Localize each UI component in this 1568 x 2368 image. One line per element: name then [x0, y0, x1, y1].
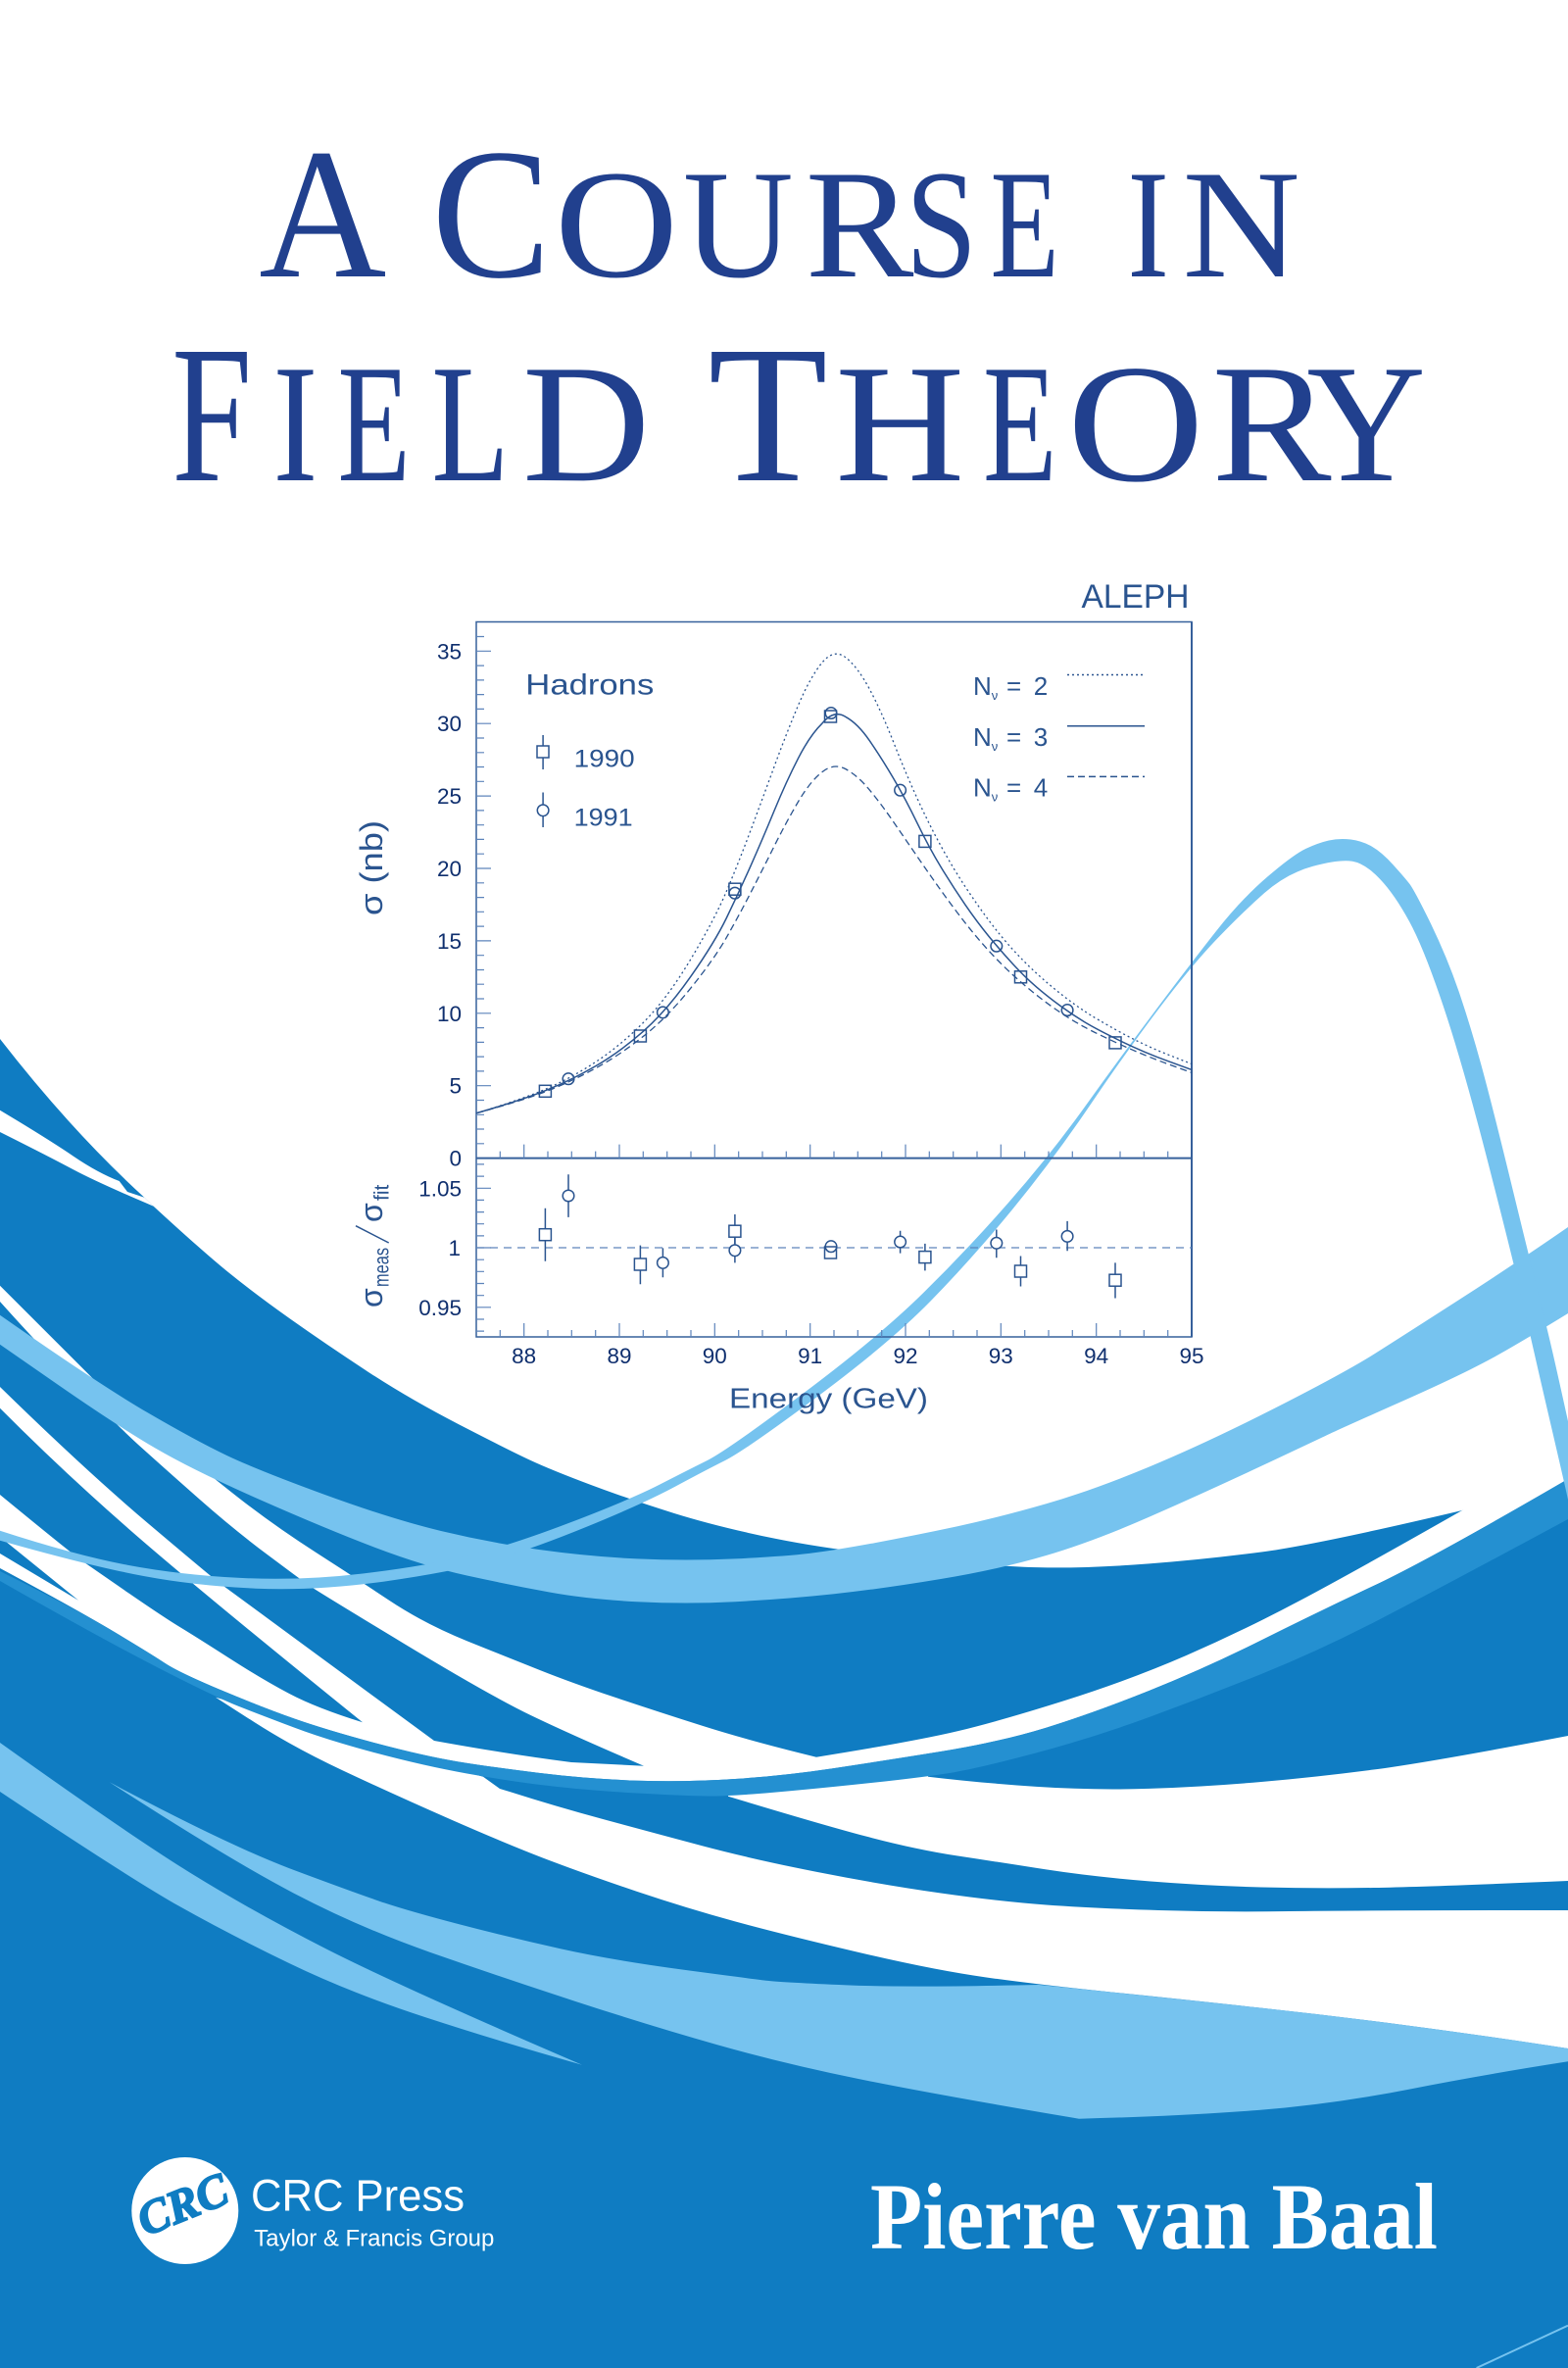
y axis numbers: 15: [437, 929, 462, 954]
author name: Pierre van Baal: [870, 2164, 1438, 2269]
title line 1: N: [1182, 139, 1300, 311]
title line 1: C: [431, 112, 551, 318]
light blue arc: tapered line rising over the chart: [0, 839, 1568, 1589]
legend: neutrino families: ν: [992, 739, 998, 754]
title line 2: Y: [1306, 331, 1426, 518]
title line 1: A: [259, 112, 386, 318]
legend: data series: [525, 669, 654, 831]
curves: neutrino family predictions: [476, 654, 1192, 1113]
y axis numbers: [418, 639, 462, 1320]
y axis numbers: 25: [437, 784, 462, 809]
x axis numbers: 91: [798, 1344, 822, 1368]
legend: neutrino families: =: [1006, 722, 1021, 752]
x axis numbers: 92: [893, 1344, 918, 1368]
y axis numbers: 1.05: [418, 1176, 462, 1201]
medium blue ribbon: [0, 1479, 1568, 1797]
y axis title: ratio: [354, 1184, 394, 1307]
legend: neutrino families: 2: [1034, 671, 1048, 701]
x axis numbers: 93: [989, 1344, 1013, 1368]
logo roundel: CRC: [130, 2163, 236, 2246]
axis ticks: [476, 637, 1168, 1337]
title line 2: I: [272, 331, 318, 518]
publisher group: Taylor & Francis Group: [254, 2226, 494, 2252]
x axis numbers: 95: [1179, 1344, 1204, 1368]
light blue ribbon: lower left: [0, 1743, 582, 2065]
title line 2: E: [337, 331, 411, 518]
y axis numbers: 10: [437, 1002, 462, 1026]
title line 2: H: [835, 331, 964, 518]
y axis title: ratio: σ: [354, 1203, 389, 1222]
title line 2: E: [983, 331, 1057, 518]
legend: neutrino families: =: [1006, 772, 1021, 802]
x axis numbers: 88: [512, 1344, 536, 1368]
title line 2: L: [431, 331, 510, 518]
title line 2: D: [522, 331, 650, 518]
x axis numbers: 89: [607, 1344, 632, 1368]
data points: 1991 circles, main panel: [563, 708, 1073, 1084]
thin light line: bottom right corner: [1477, 2326, 1568, 2368]
legend: neutrino families: ν: [992, 688, 998, 703]
light blue ribbon: lower wide: [110, 1782, 1568, 2119]
title line 2: F: [172, 307, 252, 523]
title line 1: U: [683, 139, 794, 311]
title line 1: E: [991, 139, 1059, 311]
y axis title: ratio: σ: [354, 1288, 389, 1307]
legend: neutrino families: 4: [1034, 772, 1048, 802]
y axis numbers: 35: [437, 639, 462, 664]
y axis numbers: 1: [448, 1236, 461, 1260]
ratio panel: 1990 squares with error bars: [539, 1209, 1121, 1298]
y axis numbers: 0.95: [418, 1296, 462, 1320]
publisher logo: CRC Press: [130, 2157, 494, 2264]
title line 1: S: [906, 139, 977, 311]
legend: data series: 1991: [574, 804, 633, 831]
y axis numbers: 20: [437, 857, 462, 881]
white streaks: main ribbon group: [0, 1286, 1568, 1781]
title line 2: O: [1067, 331, 1204, 518]
legend: neutrino families: 3: [1034, 722, 1048, 752]
y axis title: cross section: σ (nb): [354, 820, 389, 915]
white streak: lower band: [216, 1698, 1568, 2048]
ratio reference line: [476, 1247, 1192, 1249]
curve: N = 2 dotted: [476, 654, 1192, 1113]
light blue ribbon: large crossing band: [0, 1227, 1568, 1603]
y axis numbers: 0: [449, 1147, 462, 1171]
y axis title: ratio: meas: [370, 1248, 394, 1287]
y axis numbers: 30: [437, 712, 462, 736]
x axis numbers: 90: [703, 1344, 727, 1368]
x axis numbers: [512, 1344, 1204, 1368]
title: [172, 112, 1426, 523]
title line 1: O: [555, 139, 678, 311]
curve: N = 3 solid: [476, 715, 1192, 1113]
dark blue base shape: [0, 1039, 1568, 2368]
chart frame: [476, 621, 1192, 1337]
x axis numbers: 94: [1084, 1344, 1108, 1368]
white streak: right middle: [728, 1736, 1568, 1888]
y axis title: ratio: fit: [370, 1184, 394, 1201]
white streak: upper left: [0, 1110, 154, 1207]
legend: neutrino families: [973, 671, 1145, 804]
legend: data series: Hadrons: [525, 669, 654, 702]
legend: neutrino families: N: [973, 772, 992, 802]
title line 2: R: [1212, 331, 1332, 518]
title line 1: I: [1127, 139, 1169, 311]
x axis title: Energy (GeV): [729, 1384, 928, 1415]
legend: neutrino families: N: [973, 671, 992, 701]
legend: data series: 1990: [574, 746, 635, 773]
legend: neutrino families: =: [1006, 671, 1021, 701]
y axis numbers: 5: [449, 1074, 462, 1099]
legend: neutrino families: N: [973, 722, 992, 752]
title line 1: R: [806, 139, 914, 311]
publisher name: CRC Press: [251, 2171, 465, 2221]
swoosh artwork: [0, 839, 1568, 2368]
data points: 1990 squares, main panel: [539, 711, 1121, 1097]
legend: neutrino families: ν: [992, 790, 998, 804]
chart: ALEPH hadron cross-section: [354, 578, 1204, 1415]
experiment label: ALEPH: [1082, 578, 1190, 616]
title line 2: T: [709, 307, 828, 523]
ratio panel: 1991 circles with error bars: [563, 1174, 1073, 1277]
curve: N = 4 dashed: [476, 766, 1192, 1113]
